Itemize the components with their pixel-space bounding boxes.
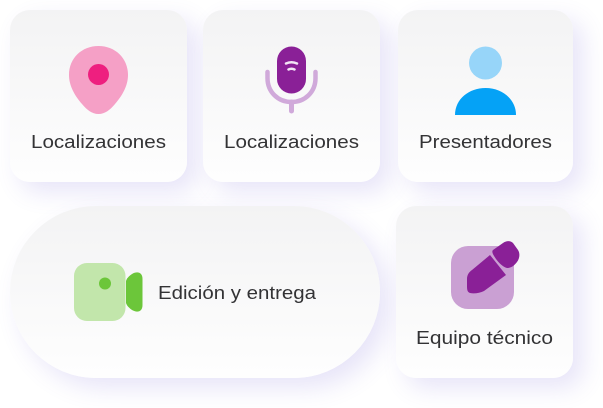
- icon: person: [455, 46, 516, 115]
- panel: Presentadores: [398, 10, 573, 182]
- label: Localizaciones: Localizaciones: [31, 131, 166, 152]
- panel: Localizaciones (pin): [10, 10, 187, 182]
- panel: Equipo técnico: [396, 206, 573, 378]
- label: Presentadores: Presentadores: [419, 131, 552, 152]
- icon: microphone: [268, 46, 316, 111]
- label: Localizaciones: Localizaciones: [224, 131, 359, 152]
- icon: location pin: [69, 46, 128, 114]
- icon: pencil: [451, 241, 519, 309]
- label: Edición y entrega: Edición y entrega: [158, 282, 317, 303]
- panel: Edición y entrega: [10, 206, 380, 378]
- icon: video camera: [74, 263, 142, 321]
- panel: Localizaciones (microphone): [203, 10, 380, 182]
- label: Equipo técnico: Equipo técnico: [416, 327, 553, 348]
